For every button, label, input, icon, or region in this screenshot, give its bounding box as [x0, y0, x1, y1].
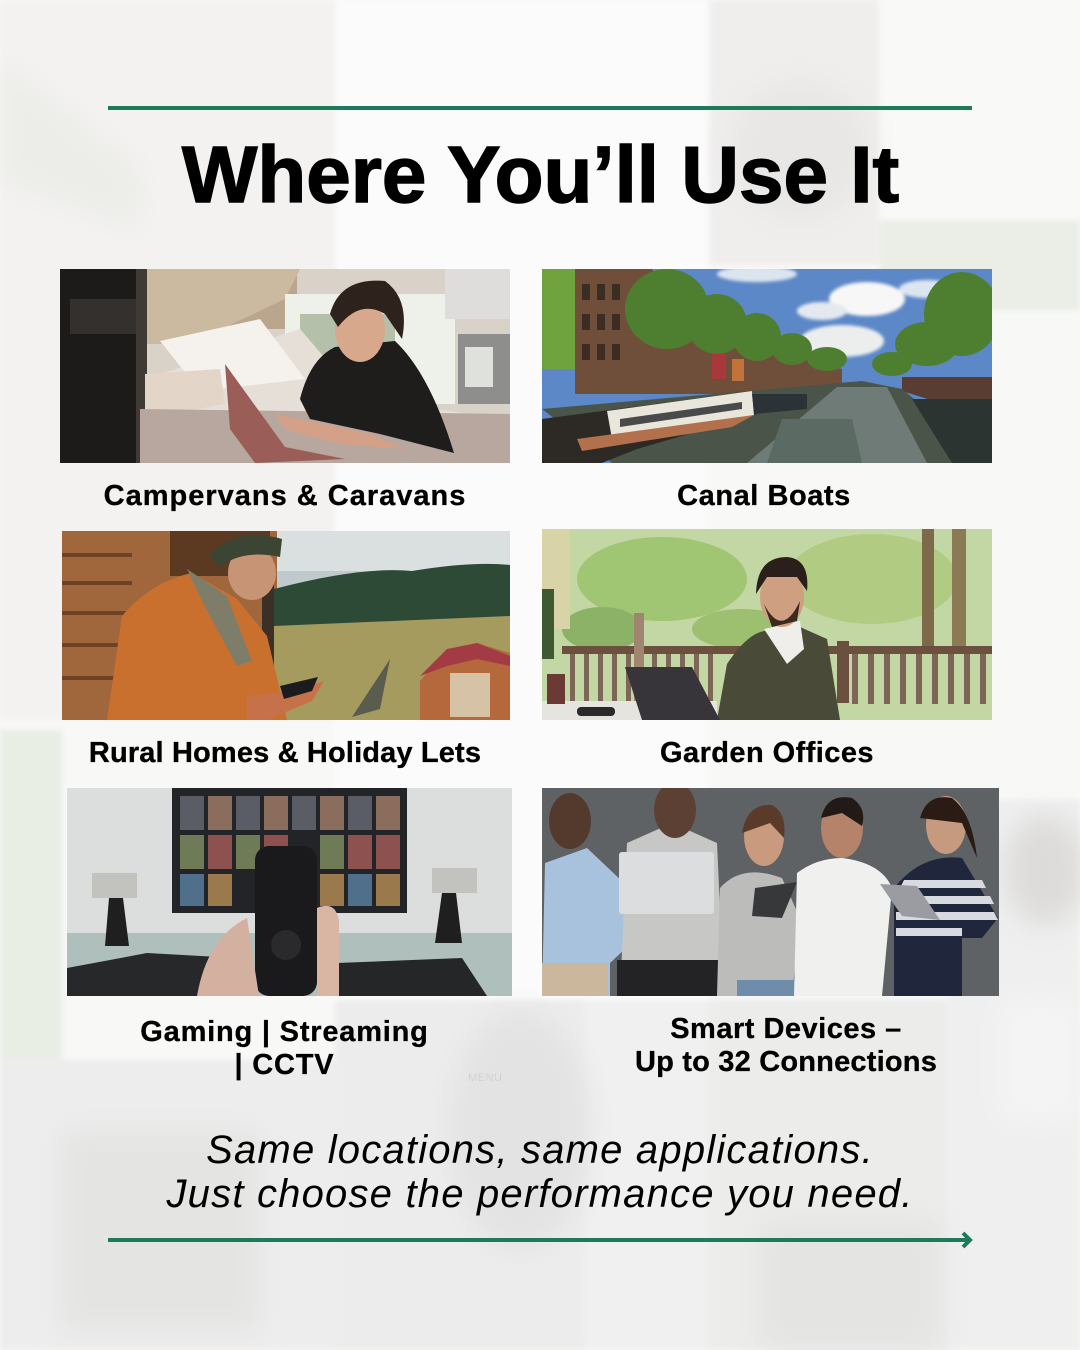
photo: streaming tv remote	[67, 788, 512, 996]
closing statement: Just choose the performance you need.	[166, 1172, 914, 1216]
photo: campervan	[60, 269, 510, 463]
photo: canal	[542, 269, 992, 463]
caption: gaming: | CCTV	[235, 1049, 334, 1081]
top rule	[108, 106, 972, 110]
caption: smart devices: Up to 32 Connections	[635, 1046, 937, 1078]
caption: campervans: Campervans & Caravans	[104, 480, 466, 512]
caption: garden offices: Garden Offices	[660, 737, 874, 769]
closing statement	[166, 1128, 914, 1216]
caption: gaming	[140, 1016, 429, 1081]
photo: smart devices	[542, 788, 999, 996]
closing statement: Same locations, same applications.	[206, 1128, 874, 1172]
caption: smart devices: Smart Devices –	[670, 1013, 902, 1045]
caption: gaming: Gaming | Streaming	[140, 1016, 429, 1048]
title: Where You’ll Use It	[182, 130, 899, 219]
ghost remote label: MENU	[468, 1072, 502, 1084]
caption: rural homes: Rural Homes & Holiday Lets	[89, 737, 481, 769]
photo: rural home	[62, 531, 510, 720]
photo: garden office	[542, 529, 992, 720]
caption: smart devices	[635, 1013, 937, 1078]
arrow	[108, 1232, 973, 1248]
caption: canal boats: Canal Boats	[677, 480, 851, 512]
